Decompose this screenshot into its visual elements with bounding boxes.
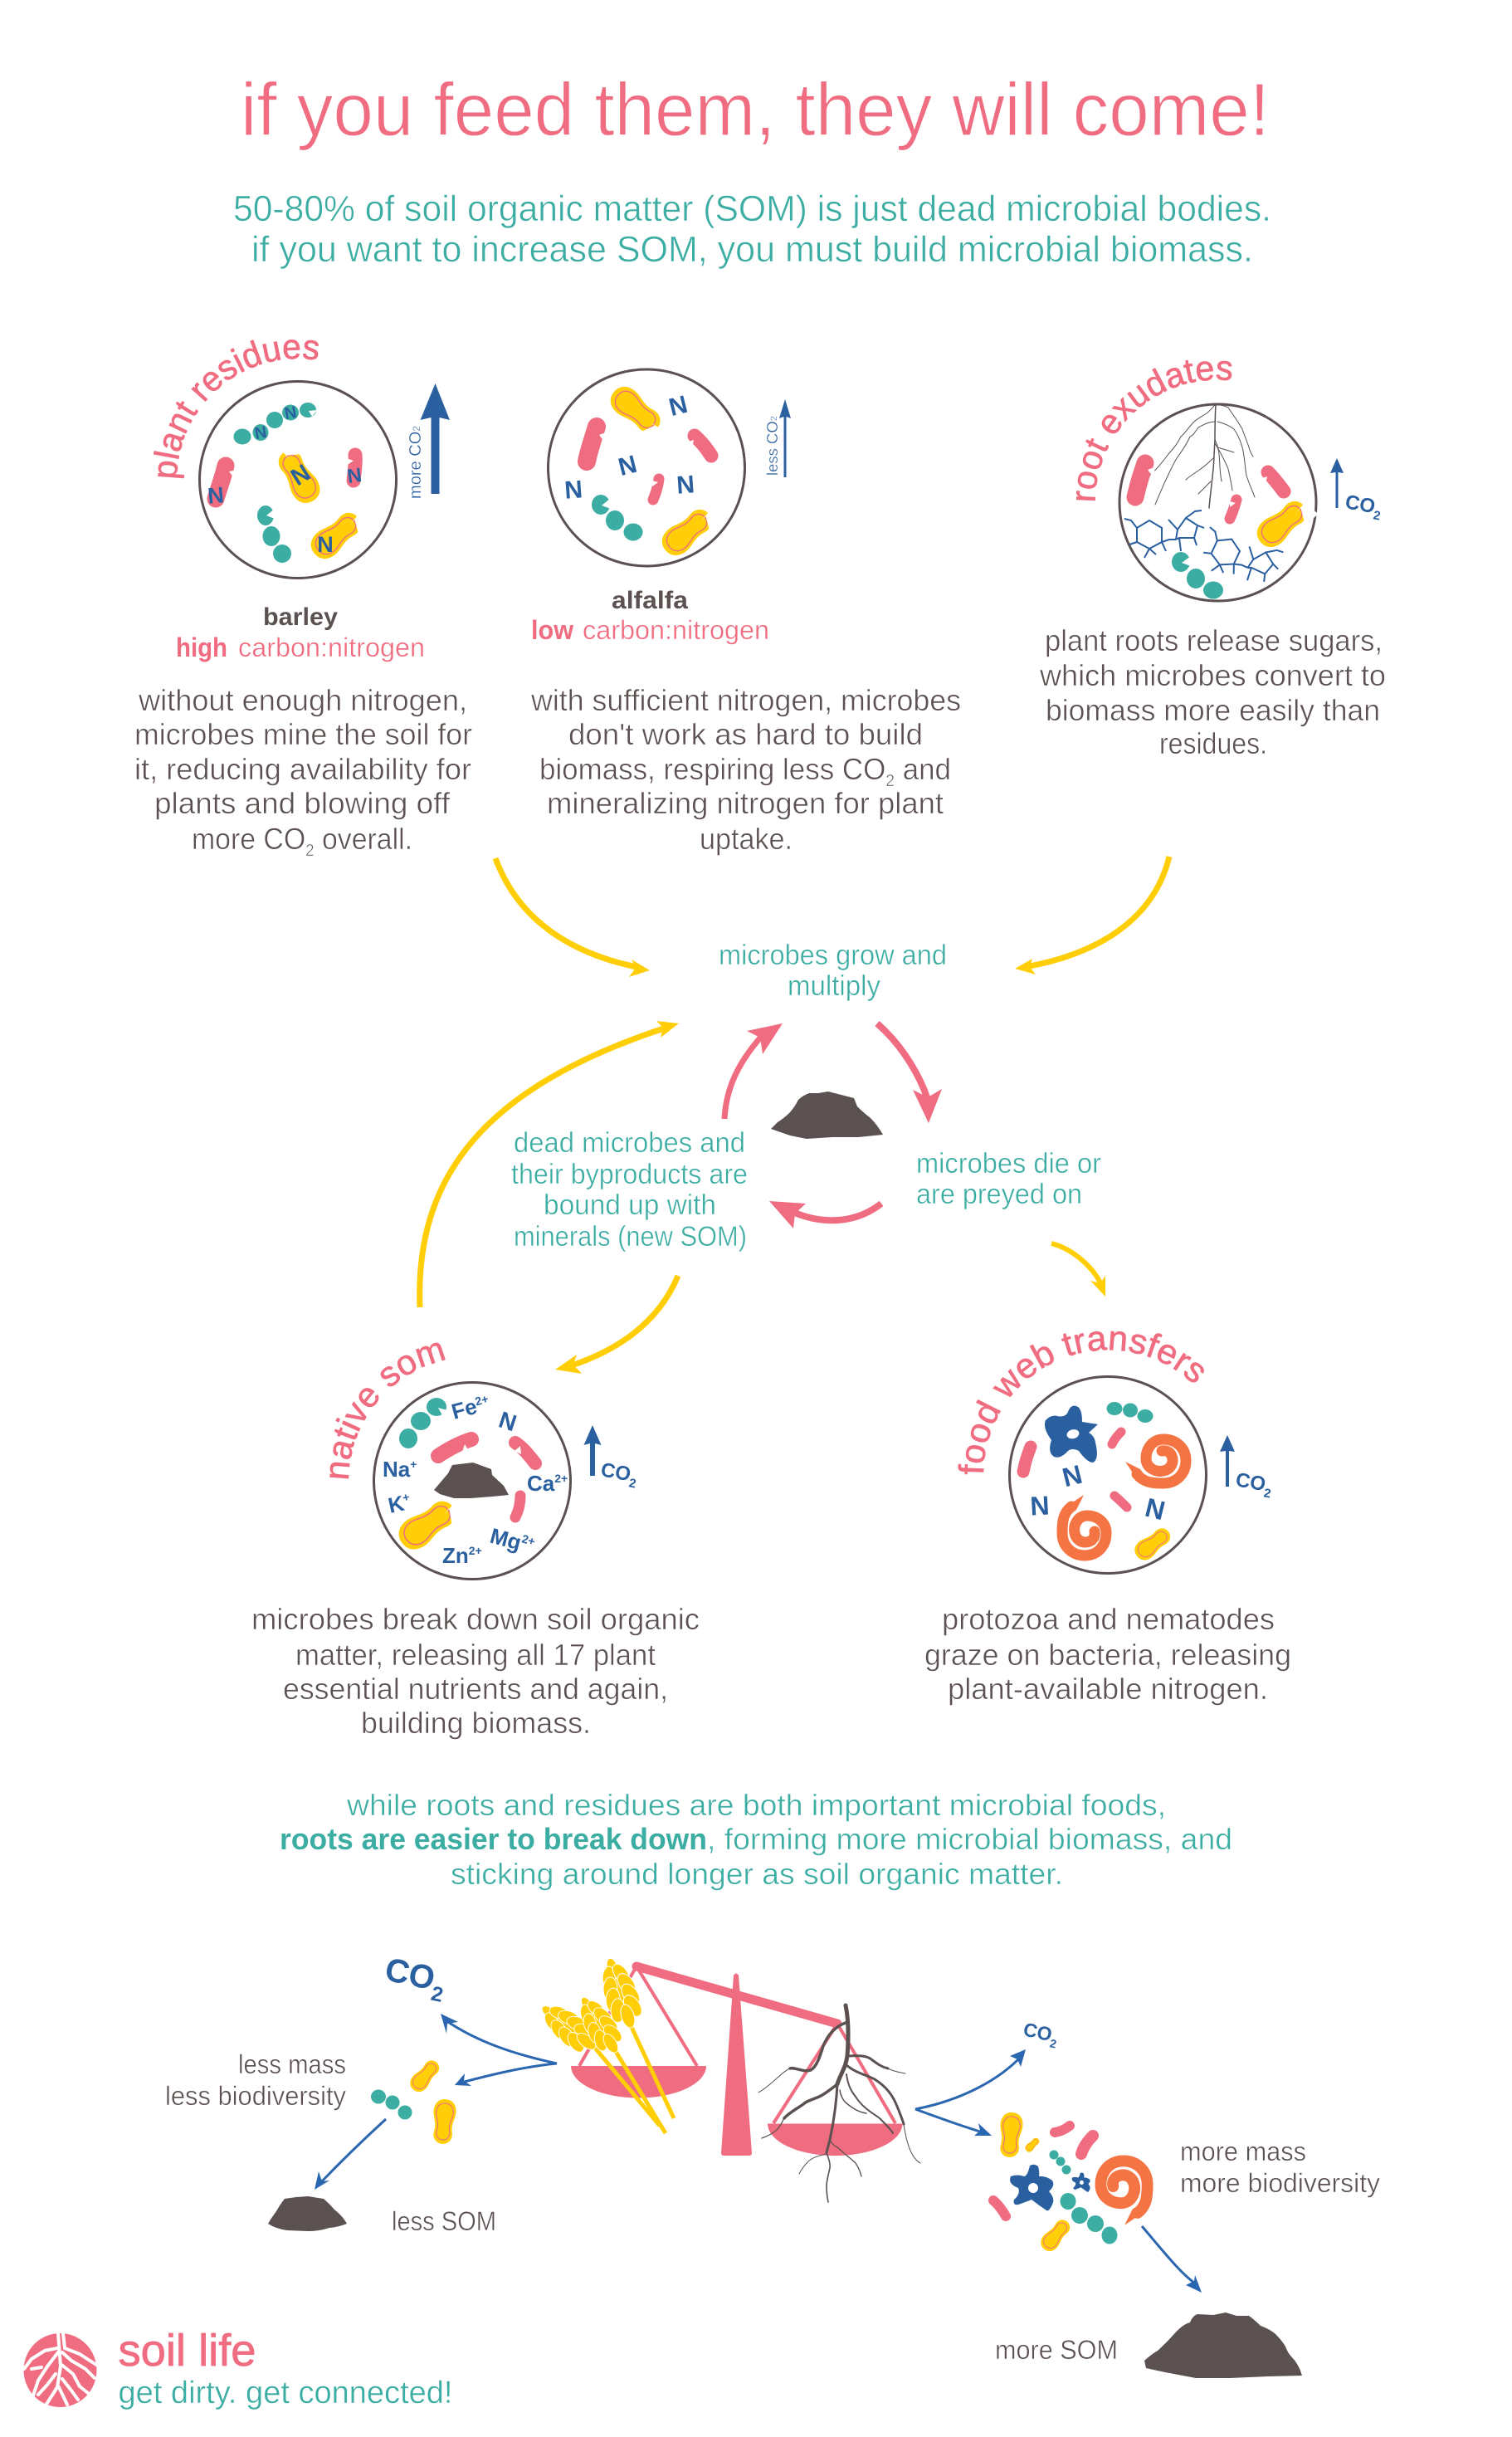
panel: right outcome [915, 2018, 1380, 2378]
left pan strings [579, 1966, 697, 2066]
label: microbes grow and multiply: microbes grow and [719, 940, 947, 971]
label: CO2 large: CO [382, 1951, 438, 1997]
arrow: to more SOM [1142, 2226, 1202, 2293]
text: barley description: microbes mine the soil for [134, 717, 472, 751]
text: root description: residues. [1159, 726, 1267, 760]
yellow microbe tiny [1023, 2136, 1041, 2154]
label: low carbon nitrogen: low [531, 615, 573, 645]
mineral nutrient labels: Ca [527, 1471, 554, 1496]
pink rod left [1135, 463, 1156, 497]
teal chain microbe lower [257, 505, 291, 563]
label: high carbon nitrogen: high [176, 632, 227, 662]
panel: plant residues barley [134, 339, 472, 860]
summary text: sticking around longer as soil organic matter. [451, 1857, 1063, 1891]
nitrogen N labels: N [1059, 1459, 1085, 1492]
arrow: to less SOM [315, 2119, 386, 2190]
nitrogen N labels: N [1142, 1492, 1168, 1526]
heading: food web transfers: food web transfers [958, 1331, 1204, 1474]
amoeba protozoa [1045, 1406, 1098, 1463]
label: dead microbes: their byproducts are [511, 1159, 748, 1190]
pink rod lower [515, 1496, 520, 1517]
text: native SOM description: matter, releasing all 17 plant [295, 1638, 656, 1672]
text: barley description: more CO [192, 822, 313, 856]
pink rod lower [1114, 1496, 1127, 1507]
text: food web description [924, 1602, 1291, 1706]
text: native SOM description: essential nutrients and again, [283, 1672, 668, 1706]
pink rod microbe right: N [346, 464, 363, 488]
logo: soil life [23, 2326, 453, 2410]
arrow: less CO2 [779, 399, 791, 477]
label: low carbon nitrogen: carbon:nitrogen [583, 615, 769, 645]
text: native SOM description [251, 1602, 700, 1740]
right pan [768, 2123, 903, 2156]
label: CO2 [1233, 1468, 1274, 1502]
yellow microbe top [604, 381, 671, 444]
label: dead microbes [511, 1127, 748, 1253]
panel: left outcome [165, 1951, 557, 2236]
label: more CO2: more CO [407, 432, 425, 499]
label: CO2 [1343, 491, 1383, 524]
yellow microbe centre [270, 439, 326, 508]
soil pile [434, 1463, 509, 1498]
text: barley description [134, 683, 472, 860]
summary text [280, 1788, 1232, 1891]
text: alfalfa description: biomass, respiring less CO [539, 752, 896, 786]
teal chain [1172, 552, 1223, 599]
mineral nutrient labels: + [402, 1490, 411, 1504]
text: alfalfa description: don't work as hard to build [568, 717, 923, 751]
circle: alfalfa soil sample [548, 369, 745, 566]
amoeba tiny [1072, 2173, 1090, 2192]
label: more CO2: 2 [411, 426, 422, 432]
yellow microbe lower [305, 503, 372, 565]
pink rod centre [652, 479, 659, 500]
text: root description: biomass more easily than [1046, 693, 1380, 727]
label: microbes die: are preyed on [916, 1179, 1082, 1210]
nitrogen N labels [1030, 1459, 1168, 1526]
teal chain [371, 2090, 412, 2120]
soil pile small [268, 2196, 347, 2231]
nitrogen N: N [666, 391, 690, 422]
label: dead microbes: minerals (new SOM) [514, 1221, 747, 1253]
pink arrow: microbes to death [877, 1023, 942, 1123]
arrow: to microbes [915, 2109, 992, 2136]
arrow: to microbes [455, 2063, 557, 2086]
label: less CO2: less CO [764, 422, 781, 476]
teal chain microbe with nitrogen: N [283, 403, 298, 423]
sugar molecule right [1193, 520, 1285, 596]
label: dead microbes: bound up with [544, 1189, 716, 1221]
text: alfalfa description: uptake. [700, 822, 793, 856]
pink rod left [1023, 1447, 1031, 1472]
arrow: more CO2 [420, 383, 450, 494]
nitrogen N labels: N [1030, 1490, 1050, 1521]
mineral nutrient labels [383, 1390, 568, 1568]
fine roots [1149, 404, 1255, 508]
nematode [1100, 2161, 1150, 2225]
label: CO2 large [380, 1951, 450, 2007]
label: less CO2: 2 [769, 416, 779, 421]
text: alfalfa description: 2 [885, 772, 895, 790]
arrow: die to food web [1051, 1243, 1105, 1297]
subtitle: 50-80% of soil organic matter (SOM) is just dead microbial bodies. [233, 188, 1271, 229]
mineral nutrient labels: K [386, 1491, 407, 1518]
teal chain microbe with nitrogen: N [253, 423, 268, 443]
teal chain microbe with nitrogen [234, 403, 317, 445]
pink rod centre [1230, 500, 1236, 519]
teal chain small [1049, 2150, 1071, 2175]
pink rod upper [1112, 1432, 1121, 1444]
mineral nutrient labels: 2+ [469, 1544, 482, 1557]
label: less SOM: less SOM [392, 2206, 496, 2236]
circle: barley soil sample [199, 382, 397, 578]
pink rod left [587, 427, 608, 462]
label: barley: barley [263, 603, 338, 631]
logo mark [23, 2333, 96, 2407]
arrow: exudates to microbes [1015, 857, 1169, 974]
mineral nutrient labels: 2+ [554, 1472, 568, 1485]
text: barley description: without enough nitrogen, [138, 683, 467, 717]
teal chain [1107, 1402, 1154, 1423]
label: CO2: 2 [628, 1476, 637, 1492]
text: root description: plant roots release sugars, [1045, 623, 1383, 657]
roots on scale [758, 2005, 920, 2202]
yellow microbe [1131, 1524, 1174, 1564]
soil pile centre [771, 1092, 883, 1139]
label: CO2 small [1021, 2018, 1061, 2051]
nitrogen N right: N [676, 471, 695, 500]
label: more mass more biodiversity: more mass [1180, 2137, 1306, 2166]
scale beam [637, 1966, 837, 2024]
amoeba large [1010, 2165, 1053, 2210]
yellow microbe [1251, 491, 1318, 554]
label: CO2 small: CO [1022, 2018, 1054, 2045]
label: CO2 [598, 1458, 639, 1492]
panel: native som [251, 1343, 700, 1740]
nitrogen N centre: N [616, 451, 640, 481]
arrow: CO2 [1330, 458, 1344, 508]
pink rod upper [438, 1439, 471, 1456]
yellow microbe lower [656, 500, 723, 562]
text: food web description: plant-available nitrogen. [948, 1672, 1268, 1706]
mineral nutrient labels: Mg [487, 1523, 524, 1555]
arrow: residues to microbes [495, 858, 650, 977]
label: less mass less biodiversity: less biodiversity [165, 2081, 346, 2111]
label: more mass more biodiversity: more biodiversity [1180, 2168, 1380, 2198]
text: alfalfa description [530, 683, 961, 856]
circle: root soil sample [1119, 404, 1316, 601]
pink arrow: death to new SOM [769, 1201, 881, 1228]
nematode right [1125, 1439, 1186, 1486]
label: microbes grow and multiply [719, 940, 947, 1002]
label: more mass more biodiversity [1180, 2137, 1380, 2198]
tagline: get dirty. get connected! [118, 2376, 453, 2410]
soil pile large [1144, 2312, 1302, 2378]
circle: food web sample [1009, 1376, 1207, 1574]
right pan strings [773, 2024, 895, 2123]
arrow: CO2 [1220, 1435, 1235, 1487]
arrow: native SOM to microbes [420, 1021, 679, 1307]
mineral nutrient labels: Na [383, 1457, 410, 1482]
mineral nutrient labels: + [410, 1458, 417, 1471]
summary text: roots are easier to break down [280, 1822, 707, 1856]
yellow microbe small [407, 2057, 443, 2095]
subtitle [233, 188, 1271, 270]
teal chain large [1061, 2193, 1117, 2244]
summary text: while roots and residues are both important microbial foods, [346, 1788, 1166, 1822]
pink rod right [1260, 472, 1284, 491]
sugar molecule left [1124, 510, 1204, 558]
title: if you feed them, they will come! [241, 69, 1270, 152]
label: CO2: CO [599, 1458, 632, 1486]
arrow: new SOM to native SOM [555, 1276, 678, 1374]
arrow: to CO2 [915, 2049, 1026, 2109]
text: native SOM description: microbes break down soil organic [251, 1602, 700, 1636]
wheat on scale [531, 1952, 674, 2133]
panel: food web transfers [924, 1331, 1291, 1706]
circle: native SOM sample [373, 1383, 571, 1579]
pink rods [993, 2126, 1093, 2216]
text: alfalfa description: and [895, 752, 951, 786]
label: alfalfa: alfalfa [612, 587, 688, 614]
subtitle: if you want to increase SOM, you must build microbial biomass. [251, 229, 1253, 270]
text: alfalfa description: with sufficient nitrogen, microbes [530, 683, 961, 717]
mineral nutrient labels: Zn [442, 1543, 469, 1568]
nitrogen N left: N [563, 476, 583, 505]
yellow microbe centre: N [286, 460, 315, 491]
scale post [721, 1974, 752, 2156]
pink rod microbe left: N [207, 482, 225, 509]
label: microbes die [916, 1148, 1101, 1210]
yellow microbe lower [1037, 2216, 1074, 2254]
teal chain [399, 1398, 447, 1448]
mineral nutrient labels: 2+ [520, 1532, 537, 1548]
label: CO2 small: 2 [1049, 2036, 1058, 2051]
text: barley description: it, reducing availability for [134, 752, 471, 786]
text: root description [1039, 623, 1386, 760]
label: less mass less biodiversity: less mass [238, 2049, 346, 2079]
yellow microbe large [431, 2098, 457, 2145]
nematode lower [1060, 1495, 1106, 1555]
label: dead microbes: dead microbes and [514, 1127, 745, 1159]
mineral nutrient labels: N [495, 1407, 519, 1436]
text: root description: which microbes convert to [1039, 658, 1386, 692]
label: CO2: 2 [1263, 1486, 1272, 1502]
pink arrow: new SOM to microbes [724, 1023, 783, 1119]
label: CO2 large: 2 [429, 1982, 445, 2007]
label: high carbon nitrogen: carbon:nitrogen [238, 632, 425, 662]
summary text: , forming more microbial biomass, and [707, 1822, 1232, 1856]
pink rod right [686, 436, 711, 456]
text: barley description: plants and blowing off [154, 786, 451, 820]
text: native SOM description: building biomass. [361, 1706, 591, 1740]
yellow microbe [393, 1491, 468, 1557]
left pan [571, 2066, 706, 2098]
yellow microbe lower: N [317, 532, 334, 557]
text: food web description: protozoa and nematodes [942, 1602, 1275, 1636]
mineral nutrient labels: Fe [449, 1394, 480, 1424]
text: barley description: 2 [305, 842, 315, 860]
mineral nutrient labels: 2+ [474, 1392, 490, 1408]
pink rod microbe left [207, 466, 237, 509]
label: more SOM: more SOM [995, 2335, 1118, 2365]
arrow: to CO2 [441, 2014, 557, 2063]
heading: plant residues: plant residues [153, 339, 319, 478]
label: CO2: CO [1234, 1468, 1267, 1496]
balance scale [571, 1966, 903, 2156]
label: microbes grow and multiply: multiply [788, 970, 880, 1002]
label: less mass less biodiversity [165, 2049, 346, 2111]
label: microbes die: microbes die or [916, 1148, 1101, 1179]
teal chain [592, 495, 642, 541]
text: food web description: graze on bacteria, releasing [924, 1638, 1291, 1672]
panel: alfalfa [530, 369, 961, 856]
brand name: soil life [118, 2326, 256, 2376]
label: CO2: 2 [1373, 508, 1382, 524]
label: CO2: CO [1344, 491, 1377, 518]
pink rod right [515, 1443, 535, 1463]
heading: root exudates: root exudates [1076, 360, 1232, 501]
cycle: microbe life cycle [511, 940, 1101, 1253]
arrow: CO2 [584, 1425, 601, 1476]
yellow microbe large [997, 2112, 1024, 2158]
text: alfalfa description: mineralizing nitrogen for plant [547, 786, 944, 820]
heading: native som: native som [329, 1343, 446, 1479]
text: barley description: overall. [315, 822, 412, 856]
panel: root exudates [1039, 360, 1386, 760]
